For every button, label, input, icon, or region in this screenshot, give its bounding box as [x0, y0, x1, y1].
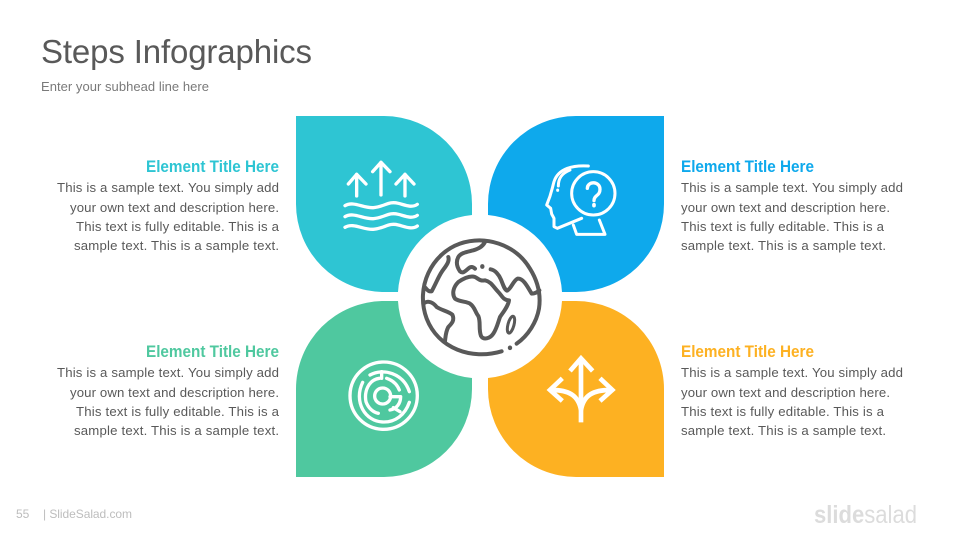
text block: top right: your own text and description here.	[681, 200, 890, 215]
footer: page number and site: | SlideSalad.com	[43, 507, 132, 521]
text block: top left: This text is fully editable. This is a	[76, 219, 280, 234]
text block: bottom right: your own text and description here.	[681, 385, 890, 400]
text block: top right: This is a sample text. You simply add	[681, 180, 903, 195]
text block: bottom right: sample text. This is a sample text.	[681, 423, 886, 438]
text block: top right: This text is fully editable. This is a	[681, 219, 885, 234]
logo: slidesalad: slidesalad	[814, 501, 917, 529]
footer: page number and site: 55	[16, 507, 30, 521]
icon: maze	[350, 362, 417, 429]
text block: bottom right: This text is fully editable. This is a	[681, 404, 885, 419]
petal: green	[296, 301, 472, 477]
text block: bottom left	[57, 343, 280, 438]
text block: top right	[681, 158, 903, 253]
text block: bottom left: This is a sample text. You simply add	[57, 365, 279, 380]
icon: head with question mark	[547, 166, 615, 234]
text block: top left	[57, 158, 280, 253]
text block: top left: Element Title Here	[146, 158, 279, 176]
petal: orange	[488, 301, 664, 477]
text block: top left: sample text. This is a sample text.	[74, 238, 279, 253]
text block: top left: This is a sample text. You simply add	[57, 180, 279, 195]
petal: blue	[488, 116, 664, 292]
petal: teal	[296, 116, 472, 292]
text block: top left: your own text and description here.	[70, 200, 279, 215]
subhead: Enter your subhead line here	[41, 79, 209, 94]
icon: three-way arrows	[550, 358, 612, 422]
text block: bottom left: Element Title Here	[146, 343, 279, 361]
text block: bottom left: sample text. This is a sample text.	[74, 423, 279, 438]
text block: top right: Element Title Here	[681, 158, 814, 176]
text block: bottom right: This is a sample text. You simply add	[681, 365, 903, 380]
title: Steps Infographics	[41, 33, 312, 70]
text block: bottom right: Element Title Here	[681, 343, 814, 361]
icon: globe	[423, 241, 540, 354]
text block: top right: sample text. This is a sample text.	[681, 238, 886, 253]
text block: bottom left: This text is fully editable. This is a	[76, 404, 280, 419]
text block: bottom left: your own text and description here.	[70, 385, 279, 400]
text block: bottom right	[681, 343, 903, 438]
icon: arrows rising from water	[345, 162, 417, 229]
